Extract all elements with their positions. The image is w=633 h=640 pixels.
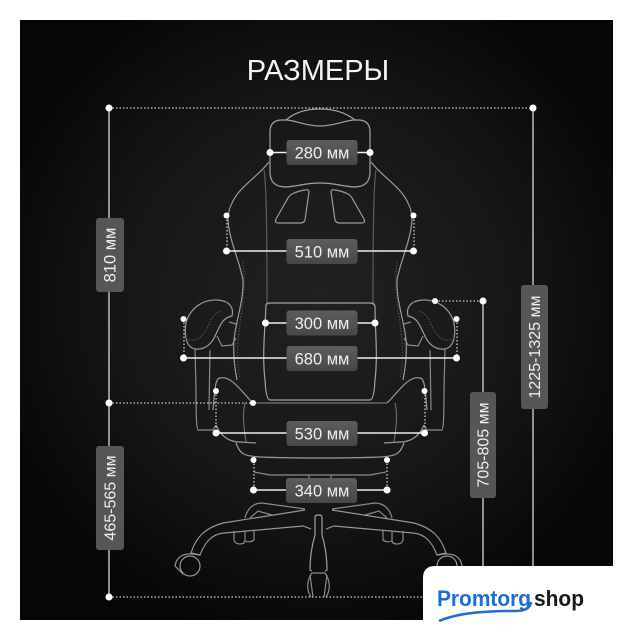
overall frame dimension lines — [106, 104, 536, 600]
label: 510 мм — [286, 239, 358, 264]
logo panel: Promtorgshop: Promtorg — [437, 586, 531, 611]
label: 680 мм — [286, 346, 358, 371]
label: 510 мм: 510 мм — [295, 244, 349, 262]
label: 300 мм — [286, 310, 358, 336]
label: 530 мм — [286, 421, 358, 446]
measurement lines and dots — [180, 149, 460, 494]
label: 810 мм: 810 мм — [102, 228, 120, 282]
label: 530 мм: 530 мм — [295, 426, 349, 444]
label: 465-565 мм: 465-565 мм — [102, 455, 120, 541]
label: 810 мм — [96, 218, 124, 292]
chair outline — [175, 109, 462, 597]
label: 465-565 мм — [96, 446, 124, 550]
label: 300 мм: 300 мм — [295, 315, 349, 333]
logo panel: Promtorgshop — [423, 566, 633, 640]
label: 705-805 мм — [470, 392, 496, 498]
title: РАЗМЕРЫ — [247, 55, 389, 87]
label: 1225-1325 мм: 1225-1325 мм — [527, 296, 544, 398]
label: 340 мм — [286, 478, 357, 503]
label: 340 мм: 340 мм — [295, 482, 349, 500]
label: 705-805 мм: 705-805 мм — [476, 402, 492, 488]
label: 1225-1325 мм — [521, 285, 548, 409]
label: 680 мм: 680 мм — [295, 350, 349, 368]
label: 280 мм — [286, 140, 358, 165]
label: 280 мм: 280 мм — [295, 144, 349, 162]
logo panel: Promtorgshop: shop — [534, 586, 584, 611]
